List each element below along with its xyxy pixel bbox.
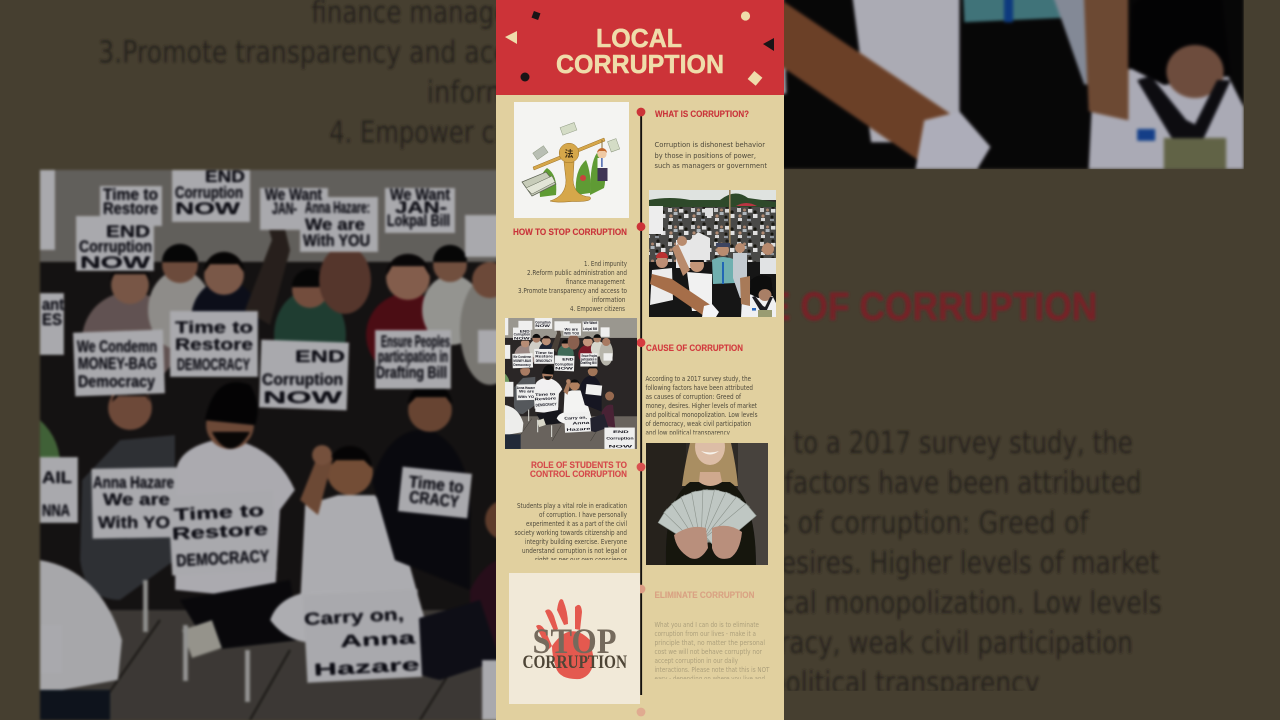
background photo sign text: END <box>106 222 150 241</box>
text: how to stop corruption: 1. End impunity <box>584 260 627 268</box>
text: role of students: right as per our own conscience <box>535 556 627 564</box>
text: eliminate corruption: What you and I can do is to eliminate <box>654 621 759 629</box>
photo: seated protesters with signs: MONEY-BAG <box>513 359 531 363</box>
text: how to stop corruption: finance management <box>566 278 625 286</box>
background enlarged cause text: and low political transparency <box>664 666 1040 701</box>
heading: eliminate corruption: ELIMINATE CORRUPTION <box>654 590 754 600</box>
background photo sign text: We are <box>305 215 365 234</box>
background photo sign text: AIL <box>42 468 72 487</box>
background photo sign text: Anna Hazare: <box>305 198 370 217</box>
hanging man <box>597 140 608 181</box>
header banner <box>496 0 784 95</box>
text: what is corruption: by those in positions of power, <box>654 152 756 160</box>
text: role of students: experimented it as a part of the civil <box>526 520 627 528</box>
photo: seated protesters with signs: Corruption <box>514 333 531 337</box>
background photo sign text: Carry on, <box>304 605 404 629</box>
text: what is corruption: such as managers or government <box>654 162 767 170</box>
stop corruption text: STOP <box>532 621 616 661</box>
background photo sign text: Restore <box>171 520 268 544</box>
heading: role of students: CONTROL CORRUPTION <box>530 469 627 479</box>
title <box>556 25 724 79</box>
text: eliminate corruption: cost we will not behave corruptly nor <box>654 648 762 656</box>
text: how to stop corruption: 3.Promote transparency and access to <box>518 287 627 295</box>
illustration: stop corruption hand print <box>509 573 640 704</box>
photo: seated protesters with signs: DEMOCRACY <box>536 402 557 407</box>
text: role of students: understand corruption is not legal or <box>522 547 627 555</box>
background photo sign text: Drafting Bill <box>376 363 447 382</box>
background photo sign text: NOW <box>263 388 344 407</box>
photo: seated protesters with signs: Corruption <box>555 363 574 367</box>
text: cause of corruption: money, desires. Higher levels of market <box>646 402 757 410</box>
background photo sign text: NOW <box>175 199 241 218</box>
photo: seated protesters with signs: Corruption <box>606 437 635 441</box>
infographic panel <box>496 0 784 720</box>
background photo sign text: Restore <box>103 199 158 218</box>
red hand <box>536 599 594 679</box>
photo: seated protesters with signs: With YOU <box>564 331 579 335</box>
photo: seated protesters with signs: Ensure Peoples <box>582 354 597 358</box>
text: cause of corruption: and political monopolization. Low levels <box>646 411 758 419</box>
background photo sign text: DEMOCRACY <box>176 547 270 570</box>
photo: seated protesters with signs: Democracy <box>513 363 532 367</box>
text: role of students <box>514 502 627 564</box>
confetti shapes <box>505 11 774 86</box>
background photo sign text: NOW <box>80 253 152 272</box>
background photo sign text: Hazare <box>313 655 420 680</box>
photo: woman holding fan of money <box>646 443 768 565</box>
stop corruption text <box>522 621 627 673</box>
background enlarged cause text: According to a 2017 survey study, the <box>664 426 1133 461</box>
background photo sign text <box>42 167 465 680</box>
text: how to stop corruption: 2.Reform public administration and <box>527 269 627 277</box>
background photo sign text: Corruption <box>262 370 343 389</box>
text: eliminate corruption: interactions. Please note that this is NOT <box>654 666 770 674</box>
stack of money <box>522 172 556 196</box>
background photo sign text: ES <box>42 310 62 329</box>
background enlarged how-to-stop text: 3.Promote transparency and access to <box>98 36 582 71</box>
text: cause of corruption: According to a 2017 survey study, the <box>646 375 751 383</box>
background blurred protest photo <box>38 168 496 720</box>
photo: seated protesters with signs: We are <box>519 390 534 394</box>
text: eliminate corruption: principle that, no matter the personal <box>654 639 765 647</box>
text: what is corruption <box>654 141 767 170</box>
text: role of students: Students play a vital role in eradication <box>517 502 627 510</box>
stop corruption text: CORRUPTION <box>522 652 627 673</box>
photo: seated protesters with signs: Time to <box>535 392 556 397</box>
text: cause of corruption: and low political transparency <box>646 429 730 437</box>
photo: seated protesters with signs: Anna <box>572 421 591 426</box>
background photo sign text: DEMOCRACY <box>177 355 250 374</box>
text: cause of corruption <box>646 375 758 437</box>
photo: seated protesters with signs: Lokpal Bill <box>583 327 597 331</box>
text: role of students: of corruption. I have personally <box>539 511 627 519</box>
text: cause of corruption: of democracy, weak civil participation <box>646 420 751 428</box>
title: LOCAL <box>596 25 682 53</box>
background photo sign text: Lokpal Bill <box>387 211 450 230</box>
background photo sign text: Time to <box>103 185 158 204</box>
photo: seated protesters with signs: NOW <box>555 367 574 371</box>
photo: seated protesters with signs: Carry on, <box>564 416 587 421</box>
photo: seated protesters with signs: END <box>562 357 574 361</box>
background photo sign text: Anna <box>340 628 417 651</box>
photo: crowd protest <box>649 190 776 317</box>
text: eliminate corruption: corruption from our lives - make it a <box>654 630 756 638</box>
timeline line and dots <box>637 108 645 716</box>
background photo sign text: Corruption <box>79 237 152 256</box>
background enlarged how-to-stop text <box>98 0 582 150</box>
background photo sign text: Time to <box>173 501 264 524</box>
photo: seated protesters with signs: END <box>520 329 530 333</box>
photo: seated protesters with signs: Corruption <box>535 321 551 325</box>
photo: seated protesters with signs: Anna Hazare <box>517 386 535 390</box>
photo: seated protesters with signs: NOW <box>514 336 530 340</box>
photo: seated protesters with signs: END <box>613 430 629 434</box>
photo: seated protesters with signs: We Condemn <box>513 355 532 359</box>
floating bank notes <box>533 123 620 160</box>
photo: seated protesters with signs: Drafting Bill <box>581 361 597 365</box>
text: how to stop corruption: information <box>592 296 626 304</box>
heading: cause of corruption: CAUSE OF CORRUPTION <box>646 343 743 353</box>
title: CORRUPTION <box>556 51 724 79</box>
background photo sign text: Time to <box>175 318 253 337</box>
heading: role of students: ROLE OF STUDENTS TO <box>531 460 627 470</box>
text: how to stop corruption: 4. Empower citizens <box>570 305 625 313</box>
text: cause of corruption: as causes of corruption: Greed of <box>646 393 741 401</box>
heading: how to stop corruption: HOW TO STOP CORRUPTION <box>513 227 627 237</box>
background photo sign text: Democracy <box>78 372 155 391</box>
background enlarged cause text <box>784 430 1162 691</box>
background enlarged how-to-stop text: information <box>427 75 576 110</box>
background photo sign text: We are <box>103 490 170 509</box>
text: cause of corruption: following factors have been attributed <box>646 384 753 392</box>
background photo sign text: JAN- <box>395 198 447 217</box>
illustration: scales of justice with money: 法 <box>564 147 574 160</box>
text: eliminate corruption <box>654 621 770 683</box>
hands <box>674 526 742 559</box>
background photo sign text: With YO <box>98 513 170 532</box>
background enlarged cause text: of democracy, weak civil participation <box>664 626 1133 661</box>
background photo sign text: We Condemn <box>77 337 157 356</box>
photo: seated protesters with signs: Hazare <box>566 427 590 432</box>
text: eliminate corruption: easy - depending on where you live and <box>654 675 765 683</box>
background photo sign text: participation in <box>378 347 448 366</box>
background photo sign text: Restore <box>175 335 253 354</box>
background enlarged how-to-stop text: 4. Empower citizens <box>329 115 573 150</box>
text: role of students: integrity building exercise. Everyone <box>525 538 627 546</box>
background enlarged cause text: and political monopolization. Low levels <box>664 586 1162 621</box>
heading: role of students <box>530 460 627 479</box>
photo: seated protesters with signs: We Want <box>584 321 598 325</box>
photo: seated protesters with signs: DEMOCRACY <box>536 359 552 363</box>
photo: seated protesters with signs <box>505 317 637 449</box>
background photo sign text: END <box>295 347 345 366</box>
background photo sign text: JAN- <box>272 199 297 218</box>
background photo sign text: Anna Hazare <box>93 473 174 492</box>
photo: seated protesters with signs: We are <box>565 328 578 332</box>
fan of bank notes <box>658 489 756 550</box>
background photo sign text: END <box>205 167 245 186</box>
gold balance <box>533 138 605 202</box>
background photo sign text: We Want <box>265 185 322 204</box>
background photo sign text: ant <box>42 295 64 314</box>
illustration: scales of justice with money <box>514 102 629 218</box>
text: what is corruption: Corruption is dishonest behavior <box>654 141 765 149</box>
heading: what is corruption: WHAT IS CORRUPTION? <box>655 109 749 119</box>
background enlarged cause text: as causes of corruption: Greed of <box>664 506 1089 541</box>
background blurred crowd photo <box>784 0 1244 170</box>
text: how to stop corruption <box>518 260 627 313</box>
background photo sign text: MONEY-BAG <box>78 354 157 373</box>
background photo sign text: Corruption <box>175 183 243 202</box>
photo: seated protesters with signs: Time to <box>535 351 554 355</box>
photo: seated protesters with signs: participation in <box>581 357 597 361</box>
photo: seated protesters with signs: NOW <box>608 444 633 448</box>
background photo sign text: Time to <box>408 472 465 497</box>
background photo sign text: We Want <box>390 185 450 204</box>
leaves <box>540 153 605 197</box>
background photo sign text: Ensure Peoples <box>381 332 450 351</box>
text: role of students: society working towards citizenship and <box>514 529 627 537</box>
background photo sign text: NNA <box>42 501 70 520</box>
photo: seated protesters with signs: Restore <box>535 355 553 359</box>
photo: seated protesters with signs: NOW <box>535 324 551 328</box>
background enlarged cause text: following factors have been attributed <box>664 466 1142 501</box>
background photo sign text: With YOU <box>303 231 370 250</box>
photo: seated protesters with signs: With YO <box>518 395 534 399</box>
background enlarged cause heading: CAUSE OF CORRUPTION <box>667 285 1097 329</box>
text: eliminate corruption: accept corruption in our daily <box>654 657 738 665</box>
background enlarged cause text: money, desires. Higher levels of market <box>664 546 1159 581</box>
background photo sign text: CRACY <box>408 487 461 512</box>
photo: seated protesters with signs: Restore <box>535 396 556 401</box>
